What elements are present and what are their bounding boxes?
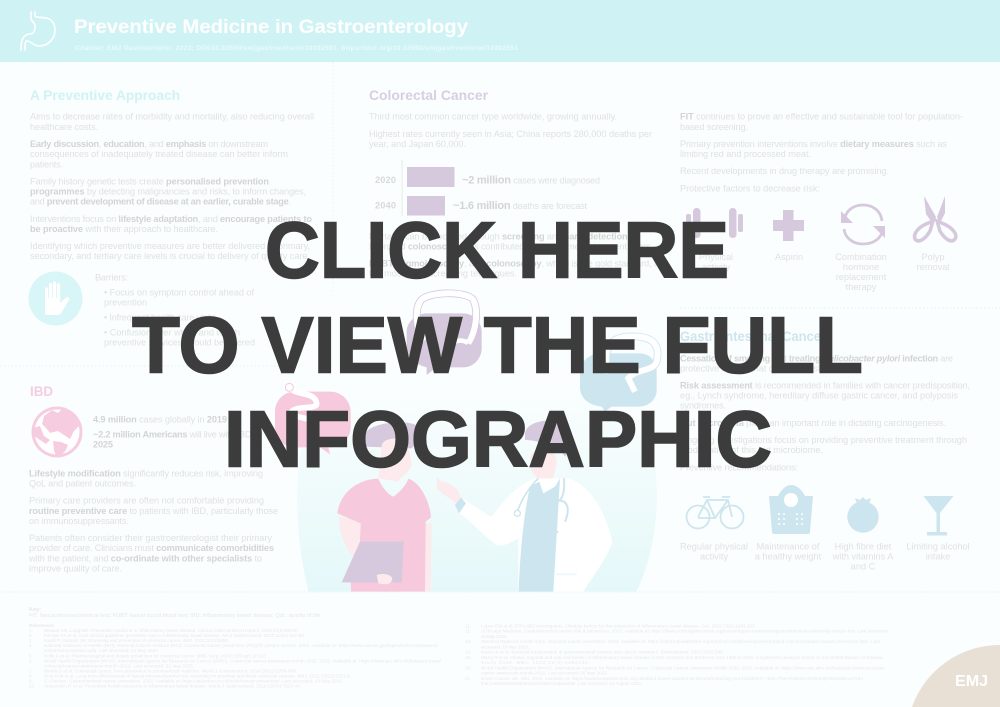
references: left column: 6. xyxy=(29,658,33,664)
text block: colorectal prevention: based screening. xyxy=(680,122,748,132)
references: right column: Stanford Medicine Health Care. Stomach cancer prevention. 2023. Available at: https://stanfordhealthcare.org/medical-conditions/cancer/stomach-cancer/stomach-cancer-prevention.html. Last xyxy=(481,639,881,644)
text block: gastrointestinal paragraphs: protective factors that decrease risk. xyxy=(680,364,825,374)
references: left column: Weaver KN, Long MD. Preventive medicine in inflammatory bowel disease. Clinical Gastroenterol Hepatol. 2019;17(5):824-8. xyxy=(44,628,298,633)
icon: cocktail glass, limiting alcohol xyxy=(906,496,970,562)
icon: hormone replacement therapy: therapy xyxy=(846,282,877,292)
text block: colorectal prevention: FIT continues to prove an effective and sustainable tool for population- xyxy=(680,112,963,122)
bar chart: cases and deaths xyxy=(375,160,600,216)
icon: bicycle, regular physical activity xyxy=(680,497,748,562)
key: FIT: faecal immunochemical test; FOBT: faecal occult blood test; IBD: inflammatory bowel disease; QoL: quality of life. xyxy=(29,613,322,619)
text block: IBD paragraphs: Lifestyle modification significantly reduces risk, improving xyxy=(29,468,263,478)
icon: dumbbell, physical activity: activity xyxy=(702,262,730,272)
text block: gastrointestinal paragraphs: eg., Lynch syndrome, hereditary diffuse gastric cancer, and polyposis xyxy=(680,390,958,400)
key xyxy=(29,607,322,619)
icon: hormone replacement therapy xyxy=(835,205,887,292)
tablet xyxy=(342,542,404,582)
references: right column: 23 May 2023. xyxy=(481,634,507,639)
references: left column: colorectal-cancer-awareness-month-2022/. Last accessed: 22 May 2023. xyxy=(44,664,194,668)
heading: colorectal cancer: Colorectal Cancer xyxy=(369,88,489,103)
text block: gastrointestinal paragraphs: Gut microbiota plays an important role in dictating carcinogenesis. xyxy=(680,418,946,428)
icon: globe xyxy=(32,406,82,458)
key: Key: xyxy=(29,607,41,613)
references: right column: 16. xyxy=(465,666,471,670)
references: left column: GI Doctors. Gastrointestinal cancer prevention. 2022. Available at: https://gidoctors.co.uk/tests/cancer-prevention/. Last accessed: 23 May 2023. xyxy=(44,679,343,684)
references: right column: Lopes EW et al. EPIC-IBD Investigators. Lifestyle factors for the prevention of inflammatory bowel disease. Gut. 2022;72(6):1093-100. xyxy=(481,624,756,628)
icon: dumbbell, physical activity: Physical xyxy=(699,252,733,262)
references: right column: Wang R et al. Global, regional and national burden of inflammatory bowel disease in 204 countries and territories from 1990 to 2019: a systematic analysis based on the Global Burden of Disease xyxy=(481,655,883,660)
text block: colorectal prevention xyxy=(680,112,963,194)
text block: colorectal prevention: Recent developments in drug therapy are promising. xyxy=(680,166,889,176)
text block: barriers xyxy=(95,272,255,348)
references: left column: Nolfo F et al. Pharmacological and dietary prevention for colorectal cancer. BMC Surg. 2013;13(Suppl 2):S16. xyxy=(44,653,267,658)
text block: approach paragraphs: Identifying which preventive measures are better delivered at primary, xyxy=(30,241,310,251)
references: left column: 1. xyxy=(29,628,33,633)
references: right column: 11. xyxy=(465,624,471,628)
references: right column: 17. xyxy=(465,676,471,681)
call to action overlay: INFOGRAPHIC xyxy=(224,394,772,484)
icon: scissors, polyp removal: removal xyxy=(917,262,949,272)
bar: 2040: 2040 xyxy=(375,200,396,210)
text block: gastrointestinal paragraphs: Ongoing investigations focus on providing preventive treatment through xyxy=(680,435,967,445)
icon: fruit, high fibre diet: with vitamins A xyxy=(832,552,894,562)
text block: approach paragraphs: and prevent development of disease at an earlier, curable stage. xyxy=(30,196,291,206)
text block: approach paragraphs: Early discussion, education, and emphasis on downstream xyxy=(30,139,268,149)
references: right column: UChicago Medicine. Gastrointestinal cancer risk & prevention. 2023. Available at: https://www.uchicagomedicine.org/cancer/types-treatments/gastrointestinal-cancers/gi-cancer-risk. Last accessed: xyxy=(481,629,889,634)
text block: approach paragraphs: healthcare costs. xyxy=(30,122,98,132)
references: right column: Study 2019. BMJ. 2023;13(3):e065186. xyxy=(481,660,590,665)
references: right column xyxy=(465,624,889,686)
text block: IBD statistics: ~2.2 million Americans will live with IBD by xyxy=(93,430,263,440)
bar: 2040: ~1.6 million deaths are forecast xyxy=(453,200,587,212)
references: left column: 8. xyxy=(29,674,33,678)
call to action overlay: TO VIEW THE FULL xyxy=(132,300,863,390)
icon: fruit, high fibre diet: and C xyxy=(851,562,876,572)
text block: barriers: • Confusion over when and which xyxy=(104,328,240,338)
text block: approach paragraphs: Interventions focus on lifestyle adaptation, and encourage patients to xyxy=(30,214,312,224)
text block: IBD paragraphs: with the patient, and co-ordinate with other specialists to xyxy=(28,554,262,564)
icon: cocktail glass, limiting alcohol: Limiting alcohol xyxy=(906,542,970,552)
text block: gastrointestinal paragraphs: Risk assessment is recommended in families with cancer predisposition, xyxy=(680,380,970,390)
text block: IBD paragraphs: routine preventive care to patients with IBD, particularly those xyxy=(29,506,278,516)
references: right column: 15. xyxy=(465,655,471,660)
bar: 2020 xyxy=(375,167,600,187)
references: left column: References: xyxy=(29,623,55,628)
text block: barriers: Barriers: xyxy=(95,272,128,282)
text block: gastrointestinal paragraphs xyxy=(680,354,970,472)
panel: IBD xyxy=(28,384,278,574)
references: right column: 13. xyxy=(465,639,471,644)
text block: gastrointestinal paragraphs: Preventive recommendations: xyxy=(680,462,798,472)
references: left column: 4. xyxy=(29,643,33,648)
icon: aspirin: Aspirin xyxy=(775,252,803,262)
references: right column: cancer-awareness-month-2022/. Last accessed: 25 May 2023. xyxy=(481,670,608,676)
speech bubble: IBD intestine xyxy=(275,383,351,454)
text block: gastrointestinal paragraphs: Cessation of smoking and treating Helicobacter pylori infection are xyxy=(680,354,953,364)
bar: 2020: ~2 million cases were diagnosed xyxy=(462,174,600,186)
icon: weighing scale, healthy weight: Maintenance of xyxy=(757,542,820,552)
references: left column: National Institutes of Health (NIH); National Cancer Institute (NCI). Colorectal cancer prevention (PDQ®)–patient version. 2022. Available at: https://www.cancer.gov/types/colorectal/patient/ xyxy=(44,642,439,648)
icon: weighing scale, healthy weight xyxy=(755,485,822,562)
text block: IBD paragraphs: improve quality of care. xyxy=(29,564,122,574)
icon: bicycle, regular physical activity: Regular physical xyxy=(680,542,748,552)
logo: EMJ badge: EMJ xyxy=(955,673,988,690)
call to action overlay: CLICK HERE xyxy=(265,206,729,294)
text block: colorectal prevention: limiting red and processed meat. xyxy=(680,149,811,159)
icon: hormone replacement therapy: Combination xyxy=(835,252,887,262)
icon: stop hand xyxy=(28,272,82,326)
text block: IBD paragraphs: provider of care. Clinicians must communicate comorbidities xyxy=(29,543,274,553)
text block: barriers: • Focus on symptom control ahead of xyxy=(104,288,254,298)
panel: a preventive approach xyxy=(28,88,314,348)
text block: gastrointestinal paragraphs: modification of this gut microbiome. xyxy=(680,445,823,455)
text block: colorectal detection: the most used screening techniques. xyxy=(369,268,517,278)
references: left column: Farraye FA et al. ACG clinical guideline: preventive care in inflammatory bowel disease. Am J Gastroenterol. 2017;112(2):241-58. xyxy=(44,633,305,638)
text block: IBD paragraphs: QoL and patient outcomes. xyxy=(29,478,136,488)
patient xyxy=(337,422,432,592)
icon: scissors, polyp removal xyxy=(914,196,956,272)
text block: approach paragraphs: patients. xyxy=(30,160,63,170)
text block: colorectal intro: Highest rates currently seen in Asia; China reports 280,000 deaths per xyxy=(369,129,652,139)
text block: approach paragraphs xyxy=(30,112,314,261)
heading: gastrointestinal cancer: Gastrointestinal Cancer xyxy=(680,329,827,344)
text block: approach paragraphs: be proactive with their approach to healthcare. xyxy=(30,224,218,234)
doctor xyxy=(437,420,612,592)
illustration: patient and doctor xyxy=(275,293,658,592)
background blob xyxy=(297,366,657,592)
text block: colorectal intro: Third most common cancer type worldwide, growing annually. xyxy=(369,112,617,122)
panel: gastrointestinal cancer xyxy=(680,329,970,572)
references: right column: accessed: 23 May 2023. xyxy=(481,644,529,650)
references: right column: 12. xyxy=(465,629,471,634)
heading: IBD: IBD xyxy=(30,384,53,399)
references: left column: Kanth P, Inadomi JM. Screening and prevention of colorectal cancer. BMJ. 2021;374:n1855. xyxy=(44,638,229,643)
title: Preventive Medicine in Gastroenterology xyxy=(74,16,468,38)
references: right column: 14. xyxy=(465,650,471,654)
text block: colorectal prevention: Protective factors to decrease risk: xyxy=(680,184,820,194)
references: left column: Binefa G et al. Colorectal cancer: from prevention to personalized medicine. World J Gastroenterol. 2014;20(22):6786-808. xyxy=(44,668,297,674)
text block: approach paragraphs: consequences of inadequately treated disease can better inform xyxy=(30,149,288,159)
text block: approach paragraphs: programmes by detecting malignancies and risks, to inform changes, xyxy=(30,186,306,196)
speech bubble: gastrointestinal xyxy=(580,336,658,412)
icon: weighing scale, healthy weight: a healthy weight xyxy=(755,552,822,562)
icon: fruit, high fibre diet: High fibre diet xyxy=(835,542,892,552)
references: left column: 9. xyxy=(29,679,33,684)
text block: IBD statistics: 4.9 million cases globally in 2019 xyxy=(93,414,227,424)
citation: Citation: EMJ Gastroenterol. 2023; DOI/10.33590/emjgastroenterol/10302591. https://doi.org/10.33590/emjgastroenterol/10302591 xyxy=(75,45,518,52)
text block: barriers: preventive services should be offered xyxy=(104,338,255,348)
icon: hormone replacement therapy: replacement xyxy=(836,272,887,282)
header banner xyxy=(0,0,1000,62)
references: right column: Bowel Cancer UK. Diet. 2019. Available at: https://www.bowelcanceruk.org.uk/about-bowel-cancer/risk-factors/reducing-your-risk/diet/#:~:text=There%20is%20strong%20evidence%20 xyxy=(481,676,863,681)
text block: colorectal prevention: Primary prevention interventions involve dietary measures such as xyxy=(680,139,947,149)
panel: colorectal cancer xyxy=(369,88,963,292)
text block: gastrointestinal paragraphs: syndromes. xyxy=(680,400,726,410)
references: left column: 5. xyxy=(29,653,33,658)
references: left column: World Health Organization (WHO); International Agency for Research on Cancer (IARC). Colorectal cancer awareness month 2022. 2022. Available at: https://www.iarc.who.int/featured-news/ xyxy=(44,658,442,664)
icon: scissors, polyp removal: Polyp xyxy=(922,252,944,262)
heading: a preventive approach: A Preventive Approach xyxy=(30,88,180,103)
icon: hormone replacement therapy: hormone xyxy=(843,262,879,272)
text block: IBD statistics xyxy=(93,414,263,450)
text block: IBD paragraphs: Primary care providers are often not comfortable providing xyxy=(29,496,264,506)
logo: EMJ badge xyxy=(912,645,1000,707)
text block: colorectal intro xyxy=(369,112,652,149)
references: left column: 10. xyxy=(29,684,35,689)
text block: IBD paragraphs: Patients often consider their gastroenterologist their primary xyxy=(29,533,272,543)
text block: colorectal detection xyxy=(369,232,667,278)
references: left column xyxy=(29,623,442,689)
text block: colorectal detection: Improved colonoscopy has contributed to improvements in recent years. xyxy=(369,242,653,252)
references: right column: Kouzu K et al. Bacterial translocation in gastrointestinal cancers and cancer treatment. Biomedicines. 2022;10(2):380. xyxy=(481,650,724,654)
icon: dumbbell, physical activity xyxy=(686,208,743,272)
text block: colorectal detection: Mortality can be reduced through screening and early detection. xyxy=(369,232,630,242)
text block: colorectal intro: year, and Japan 60,000. xyxy=(369,139,466,149)
text block: approach paragraphs: secondary, and tertiary care levels is crucial to delivery of quality care. xyxy=(30,251,310,261)
text block: barriers: • Infrequent health care visits xyxy=(104,312,216,322)
icon: cocktail glass, limiting alcohol: intake xyxy=(926,552,950,562)
references: left column: 2. xyxy=(29,633,33,638)
references: left column: 3. xyxy=(29,638,33,643)
call to action overlay xyxy=(132,206,863,484)
icon: fruit, high fibre diet xyxy=(832,497,894,572)
references: left column: Abegunde AT et al. Preventive health measures in inflammatory bowel disease. World J Gastroenterol. 2016;22(34):7625-44. xyxy=(44,684,301,689)
text block: approach paragraphs: Aims to decrease rates of morbidity and mortality, also reducing overall xyxy=(30,112,314,122)
references: right column: World Health Organisation (WHO); International Agency for Research on Cancer. Colorectal Cancer Awareness Month 2022. 2022. Available at: https://www.iarc.who.int/featured-news/colorectal- xyxy=(481,666,886,670)
icon: stomach xyxy=(21,12,55,50)
text block: IBD paragraphs: on immunosuppressants. xyxy=(29,516,129,526)
text block: barriers: prevention xyxy=(104,298,147,308)
bar: 2040 xyxy=(375,196,587,216)
references: left column: Chiu H-M et al. Long-term effectiveness of faecal immunochemical test screening for proximal and distal colorectal cancers. BMJ. 2021;70(12):2321-9. xyxy=(44,674,351,678)
icon: bicycle, regular physical activity: activity xyxy=(700,552,728,562)
references: left column: colorectal-prevention-pdq. Last accessed: 22 May 2023. xyxy=(44,648,159,653)
text block: IBD paragraphs xyxy=(28,468,278,574)
speech bubble: colorectal xyxy=(407,293,482,375)
text block: approach paragraphs: Family history genetic tests create personalised prevention xyxy=(30,176,269,186)
references: right column: that,meats%20as%20much%20as%20possible. Last accessed: 14 August 2023. xyxy=(481,681,642,686)
text block: colorectal detection: FOBT, sigmoidoscopy, and colonoscopy, which is the gold standard, are xyxy=(369,258,667,268)
bar: 2020: 2020 xyxy=(375,175,396,185)
icon: aspirin xyxy=(773,210,804,262)
references: left column: 7. xyxy=(29,668,33,674)
text block: IBD statistics: 2025 xyxy=(93,440,113,450)
